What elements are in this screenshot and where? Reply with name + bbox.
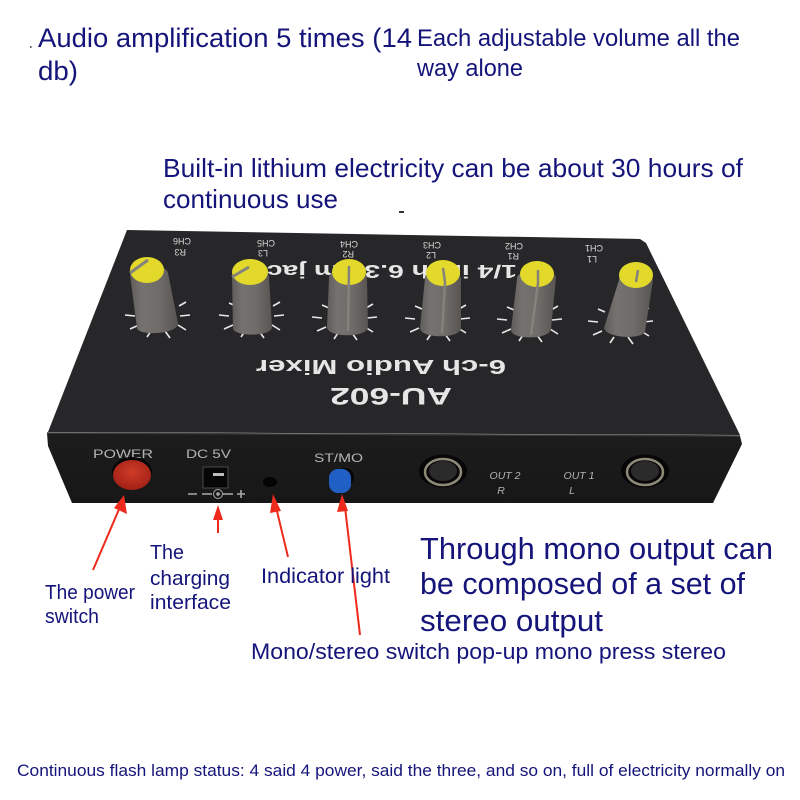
rotated product text on plate <box>249 261 517 409</box>
OUT 1 labels: L <box>569 485 575 497</box>
knob CH5 <box>232 259 272 335</box>
DC 5V label: DC 5V <box>186 447 231 461</box>
ST/MO label: ST/MO <box>314 451 363 465</box>
rotated product text on plate: 6-ch Audio Mixer <box>256 355 506 377</box>
arrow: power switch <box>93 495 127 570</box>
channel labels <box>173 236 603 264</box>
callout: mono output: stereo output <box>420 604 604 638</box>
label: power switch: switch <box>45 606 99 628</box>
OUT 2 labels <box>490 470 521 497</box>
arrow: mono/stereo switch <box>337 494 360 635</box>
power label: POWER <box>93 447 153 461</box>
OUT 1 labels <box>564 470 594 497</box>
power button <box>112 457 152 490</box>
channel labels: CH5 <box>257 238 275 248</box>
knob CH6 <box>130 257 178 333</box>
OUT 1 labels: OUT 1 <box>564 470 594 482</box>
heading: adjustable volume: Each adjustable volume all the <box>417 25 740 52</box>
output jack R <box>419 454 467 488</box>
label: indicator light: Indicator light <box>261 565 390 588</box>
knob CH4 <box>327 259 368 335</box>
rotated product text on plate: AU-602 <box>330 382 452 409</box>
label: charging interface <box>150 541 231 614</box>
arrow: charging interface <box>213 505 223 533</box>
callout: mono output: be composed of a set of <box>420 567 746 601</box>
channel labels: CH3 <box>423 240 441 250</box>
indicator light <box>263 477 277 487</box>
channel labels: R3 <box>174 247 186 257</box>
channel labels: CH4 <box>340 239 358 249</box>
label: power switch: The power <box>45 582 135 604</box>
callout: mono output <box>420 532 773 638</box>
charging jack <box>203 467 228 488</box>
channel labels: L2 <box>426 250 436 260</box>
front panel of the mixer <box>47 433 742 503</box>
channel labels: L3 <box>258 248 268 258</box>
label: charging interface: interface <box>150 591 231 614</box>
heading: built-in lithium battery: Built-in lithium electricity can be about 30 hours of <box>163 153 744 183</box>
callout: mono output: Through mono output can <box>420 532 773 566</box>
polarity symbol <box>188 490 245 498</box>
output jack L <box>621 454 669 488</box>
channel labels: CH1 <box>585 243 603 253</box>
channel labels: R1 <box>507 251 519 261</box>
OUT 2 labels: OUT 2 <box>490 470 521 482</box>
knob CH2 <box>511 261 556 337</box>
footnote: flash lamp status: Continuous flash lamp status: 4 said 4 power, said the three, and so on, full of electricity normally on <box>17 761 785 780</box>
label: power switch <box>45 582 135 628</box>
heading: audio amplification: db) <box>38 56 78 86</box>
top plate of the mixer <box>48 230 740 435</box>
label: charging interface: The <box>150 541 184 564</box>
mixer device photo illustration <box>47 230 742 503</box>
stray mark near heading <box>30 46 32 48</box>
heading: built-in lithium battery <box>163 153 744 214</box>
heading: adjustable volume: way alone <box>416 55 523 82</box>
label: charging interface: charging <box>150 567 230 590</box>
tick marks around knobs <box>125 302 653 344</box>
channel labels: R2 <box>342 249 354 259</box>
arrow: indicator light <box>270 494 288 557</box>
heading: built-in lithium battery: continuous use <box>163 184 338 214</box>
knob CH1 <box>604 262 653 337</box>
channel labels: CH6 <box>173 236 191 246</box>
heading: audio amplification: Audio amplification 5 times (14 <box>38 23 412 53</box>
channel labels: L1 <box>587 254 597 264</box>
heading: audio amplification <box>38 23 412 86</box>
rotated product text on plate: 1/4 inch 6.3mm jack <box>249 261 517 281</box>
label: mono/stereo switch: Mono/stereo switch pop-up mono press stereo <box>251 639 726 664</box>
blue mono/stereo button <box>329 468 354 493</box>
channel labels: CH2 <box>505 241 523 251</box>
knob CH3 <box>420 260 461 336</box>
stray dash above device <box>399 211 404 213</box>
OUT 2 labels: R <box>497 485 505 497</box>
heading: adjustable volume <box>416 25 740 82</box>
